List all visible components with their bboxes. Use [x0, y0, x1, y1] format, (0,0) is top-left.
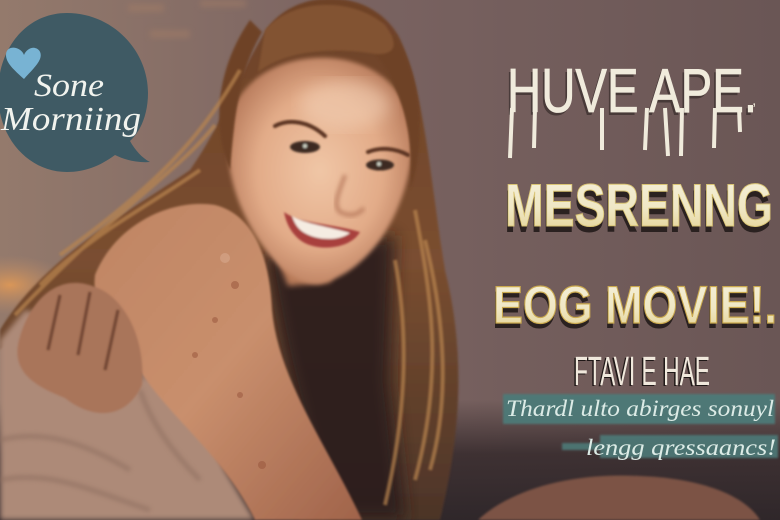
subheading [572, 348, 710, 395]
skin freckles [192, 253, 266, 469]
back hair [0, 0, 458, 520]
headline text [492, 57, 777, 395]
paint drips [510, 108, 740, 158]
dress texture [0, 390, 200, 510]
neck [262, 215, 345, 286]
nose shadow [337, 175, 364, 215]
dress [0, 310, 255, 520]
caption text: lengg qressaancs! [586, 435, 776, 460]
caption strip [503, 394, 778, 460]
bubble text: Sone [34, 68, 104, 104]
bubble text: Morniing [0, 101, 141, 138]
headline line 1 [505, 57, 757, 158]
face light patches [300, 81, 390, 129]
face [228, 58, 412, 284]
headline line 1: , [752, 92, 756, 109]
speech bubble badge [0, 13, 150, 172]
dark under-hair shadow [265, 235, 405, 520]
bubble shape [0, 13, 150, 172]
caption text: Thardl ulto abirges sonuyl [506, 396, 774, 421]
hand [17, 283, 142, 413]
teal highlight band 1 [503, 394, 775, 424]
eyebrows [275, 122, 408, 155]
front hair strands [219, 20, 420, 190]
figure: smiling young woman [0, 0, 458, 520]
eyes [290, 141, 394, 170]
golden hair highlights [15, 70, 443, 505]
arm and shoulder [95, 204, 362, 520]
smile [284, 212, 360, 248]
finger lines [48, 292, 118, 370]
knee at bottom right [478, 475, 760, 520]
teal highlight band 2 [562, 435, 778, 458]
icon: heart [6, 48, 41, 79]
